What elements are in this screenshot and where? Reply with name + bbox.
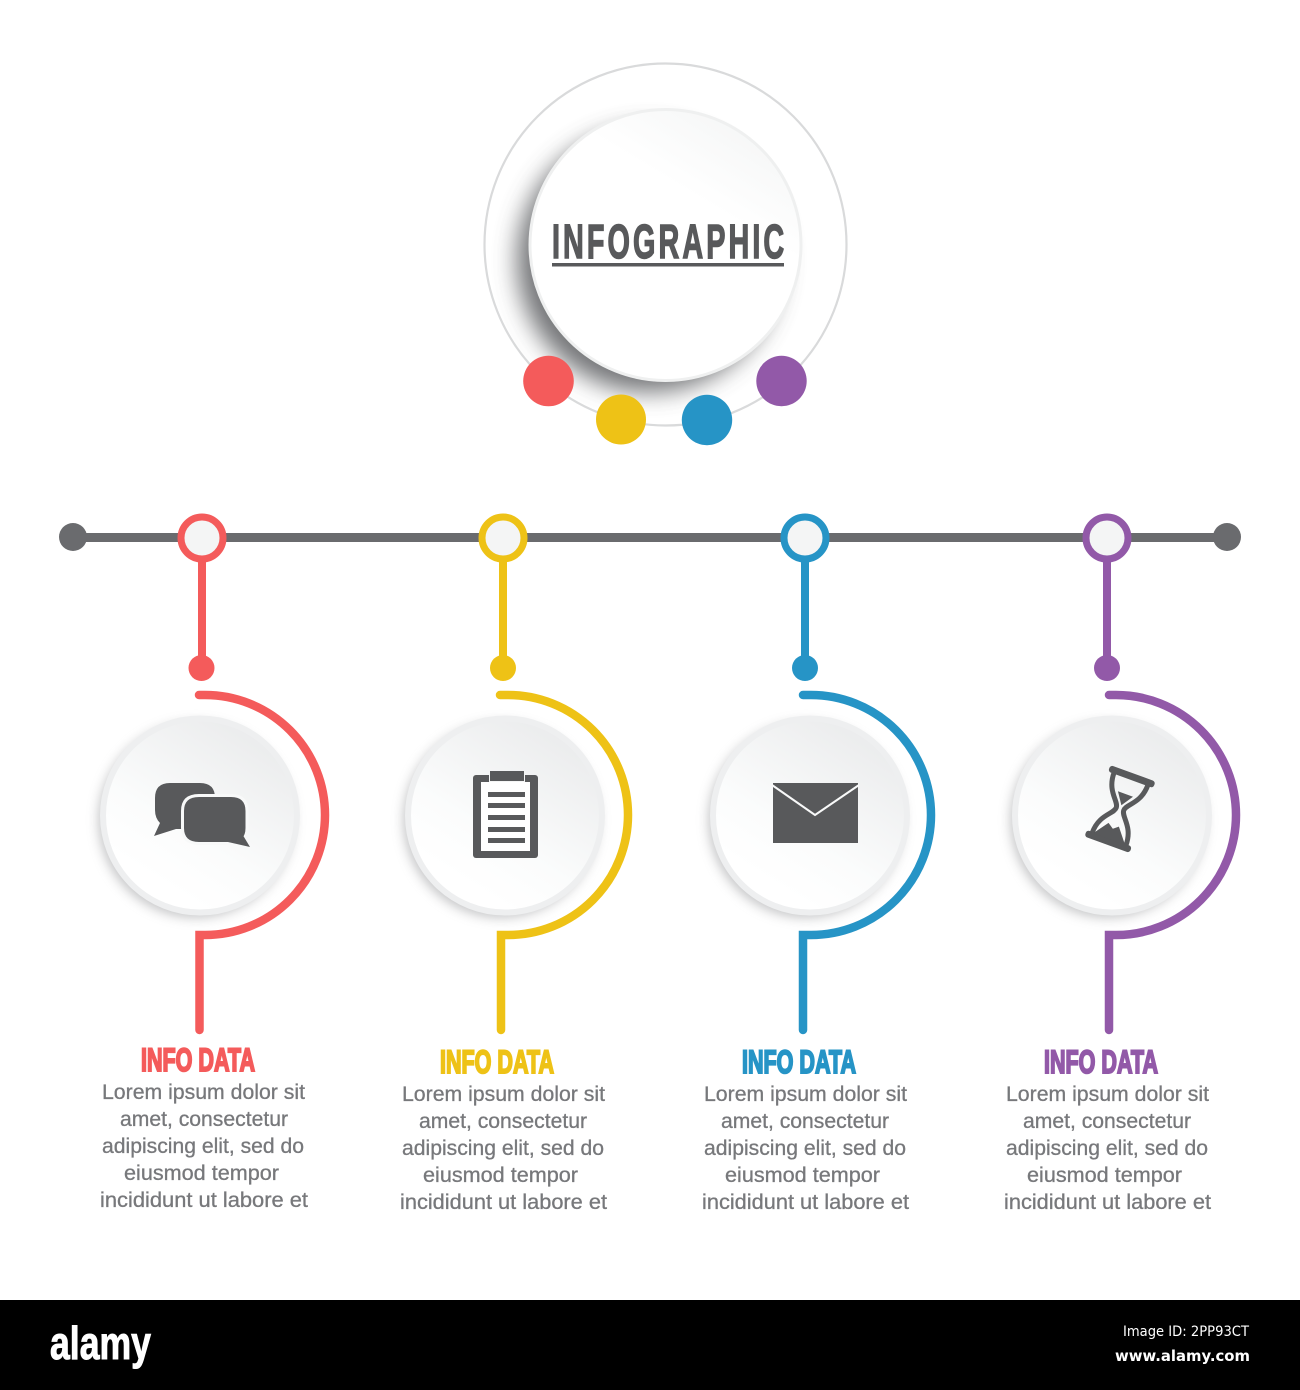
- heading: INFO DATA: [440, 1044, 554, 1080]
- connector: [784, 517, 826, 681]
- arc: [500, 695, 628, 1030]
- body text: Lorem ipsum dolor sit: [1006, 1083, 1209, 1106]
- body text: eiusmod tempor: [124, 1162, 279, 1185]
- icon: chat bubbles: [154, 783, 250, 847]
- step 3: blue: [702, 517, 931, 1214]
- outer ring: [484, 64, 846, 426]
- dot: red: [523, 356, 574, 406]
- body text: adipiscing elit, sed do: [102, 1135, 304, 1158]
- body text: adipiscing elit, sed do: [1006, 1137, 1208, 1160]
- body text: adipiscing elit, sed do: [402, 1137, 604, 1160]
- body text: incididunt ut labore et: [400, 1191, 607, 1214]
- image id: Image ID: 2PP93CT: [1123, 1324, 1249, 1340]
- body text: [1004, 1083, 1211, 1214]
- disc: [404, 718, 602, 917]
- body text: [702, 1083, 909, 1214]
- disc shadow: [517, 128, 781, 392]
- body text: Lorem ipsum dolor sit: [102, 1081, 305, 1104]
- body text: amet, consectetur: [419, 1110, 587, 1133]
- step 1: red: [99, 517, 325, 1212]
- body text: incididunt ut labore et: [1004, 1191, 1211, 1214]
- body text: Lorem ipsum dolor sit: [402, 1083, 605, 1106]
- website: www.alamy.com: [1115, 1347, 1250, 1365]
- body text: eiusmod tempor: [423, 1164, 578, 1187]
- body text: amet, consectetur: [1023, 1110, 1191, 1133]
- disc: [709, 718, 907, 917]
- body text: eiusmod tempor: [1027, 1164, 1182, 1187]
- body text: [400, 1083, 607, 1214]
- step 4: purple: [1004, 517, 1236, 1214]
- footer logo: alamy: [50, 1317, 151, 1369]
- timeline: [59, 523, 1241, 551]
- title underline: [552, 263, 784, 266]
- dot: yellow: [596, 394, 646, 444]
- central title badge: [484, 64, 846, 445]
- footer bar: [0, 1300, 1300, 1390]
- disc: [99, 718, 297, 917]
- body text: Lorem ipsum dolor sit: [704, 1083, 907, 1106]
- body text: amet, consectetur: [120, 1108, 288, 1131]
- main disc: [530, 110, 801, 380]
- icon: clipboard: [473, 771, 538, 858]
- body text: [100, 1081, 308, 1212]
- heading: INFO DATA: [141, 1042, 255, 1078]
- icon: hourglass: [1084, 765, 1156, 853]
- body text: adipiscing elit, sed do: [704, 1137, 906, 1160]
- step 2: yellow: [400, 517, 628, 1214]
- title: INFOGRAPHIC: [552, 216, 784, 269]
- connector: [1086, 517, 1128, 681]
- dot: blue: [682, 395, 732, 445]
- heading: INFO DATA: [1044, 1044, 1158, 1080]
- connector: [181, 517, 223, 681]
- body text: incididunt ut labore et: [702, 1191, 909, 1214]
- arc: [803, 695, 931, 1030]
- body text: incididunt ut labore et: [100, 1189, 308, 1212]
- disc: [1011, 718, 1209, 917]
- connector: [482, 517, 524, 681]
- body text: amet, consectetur: [721, 1110, 889, 1133]
- heading: INFO DATA: [742, 1044, 856, 1080]
- body text: eiusmod tempor: [725, 1164, 880, 1187]
- arc: [199, 695, 325, 1030]
- icon: envelope: [772, 783, 859, 843]
- dot: purple: [756, 356, 807, 406]
- arc: [1109, 695, 1236, 1030]
